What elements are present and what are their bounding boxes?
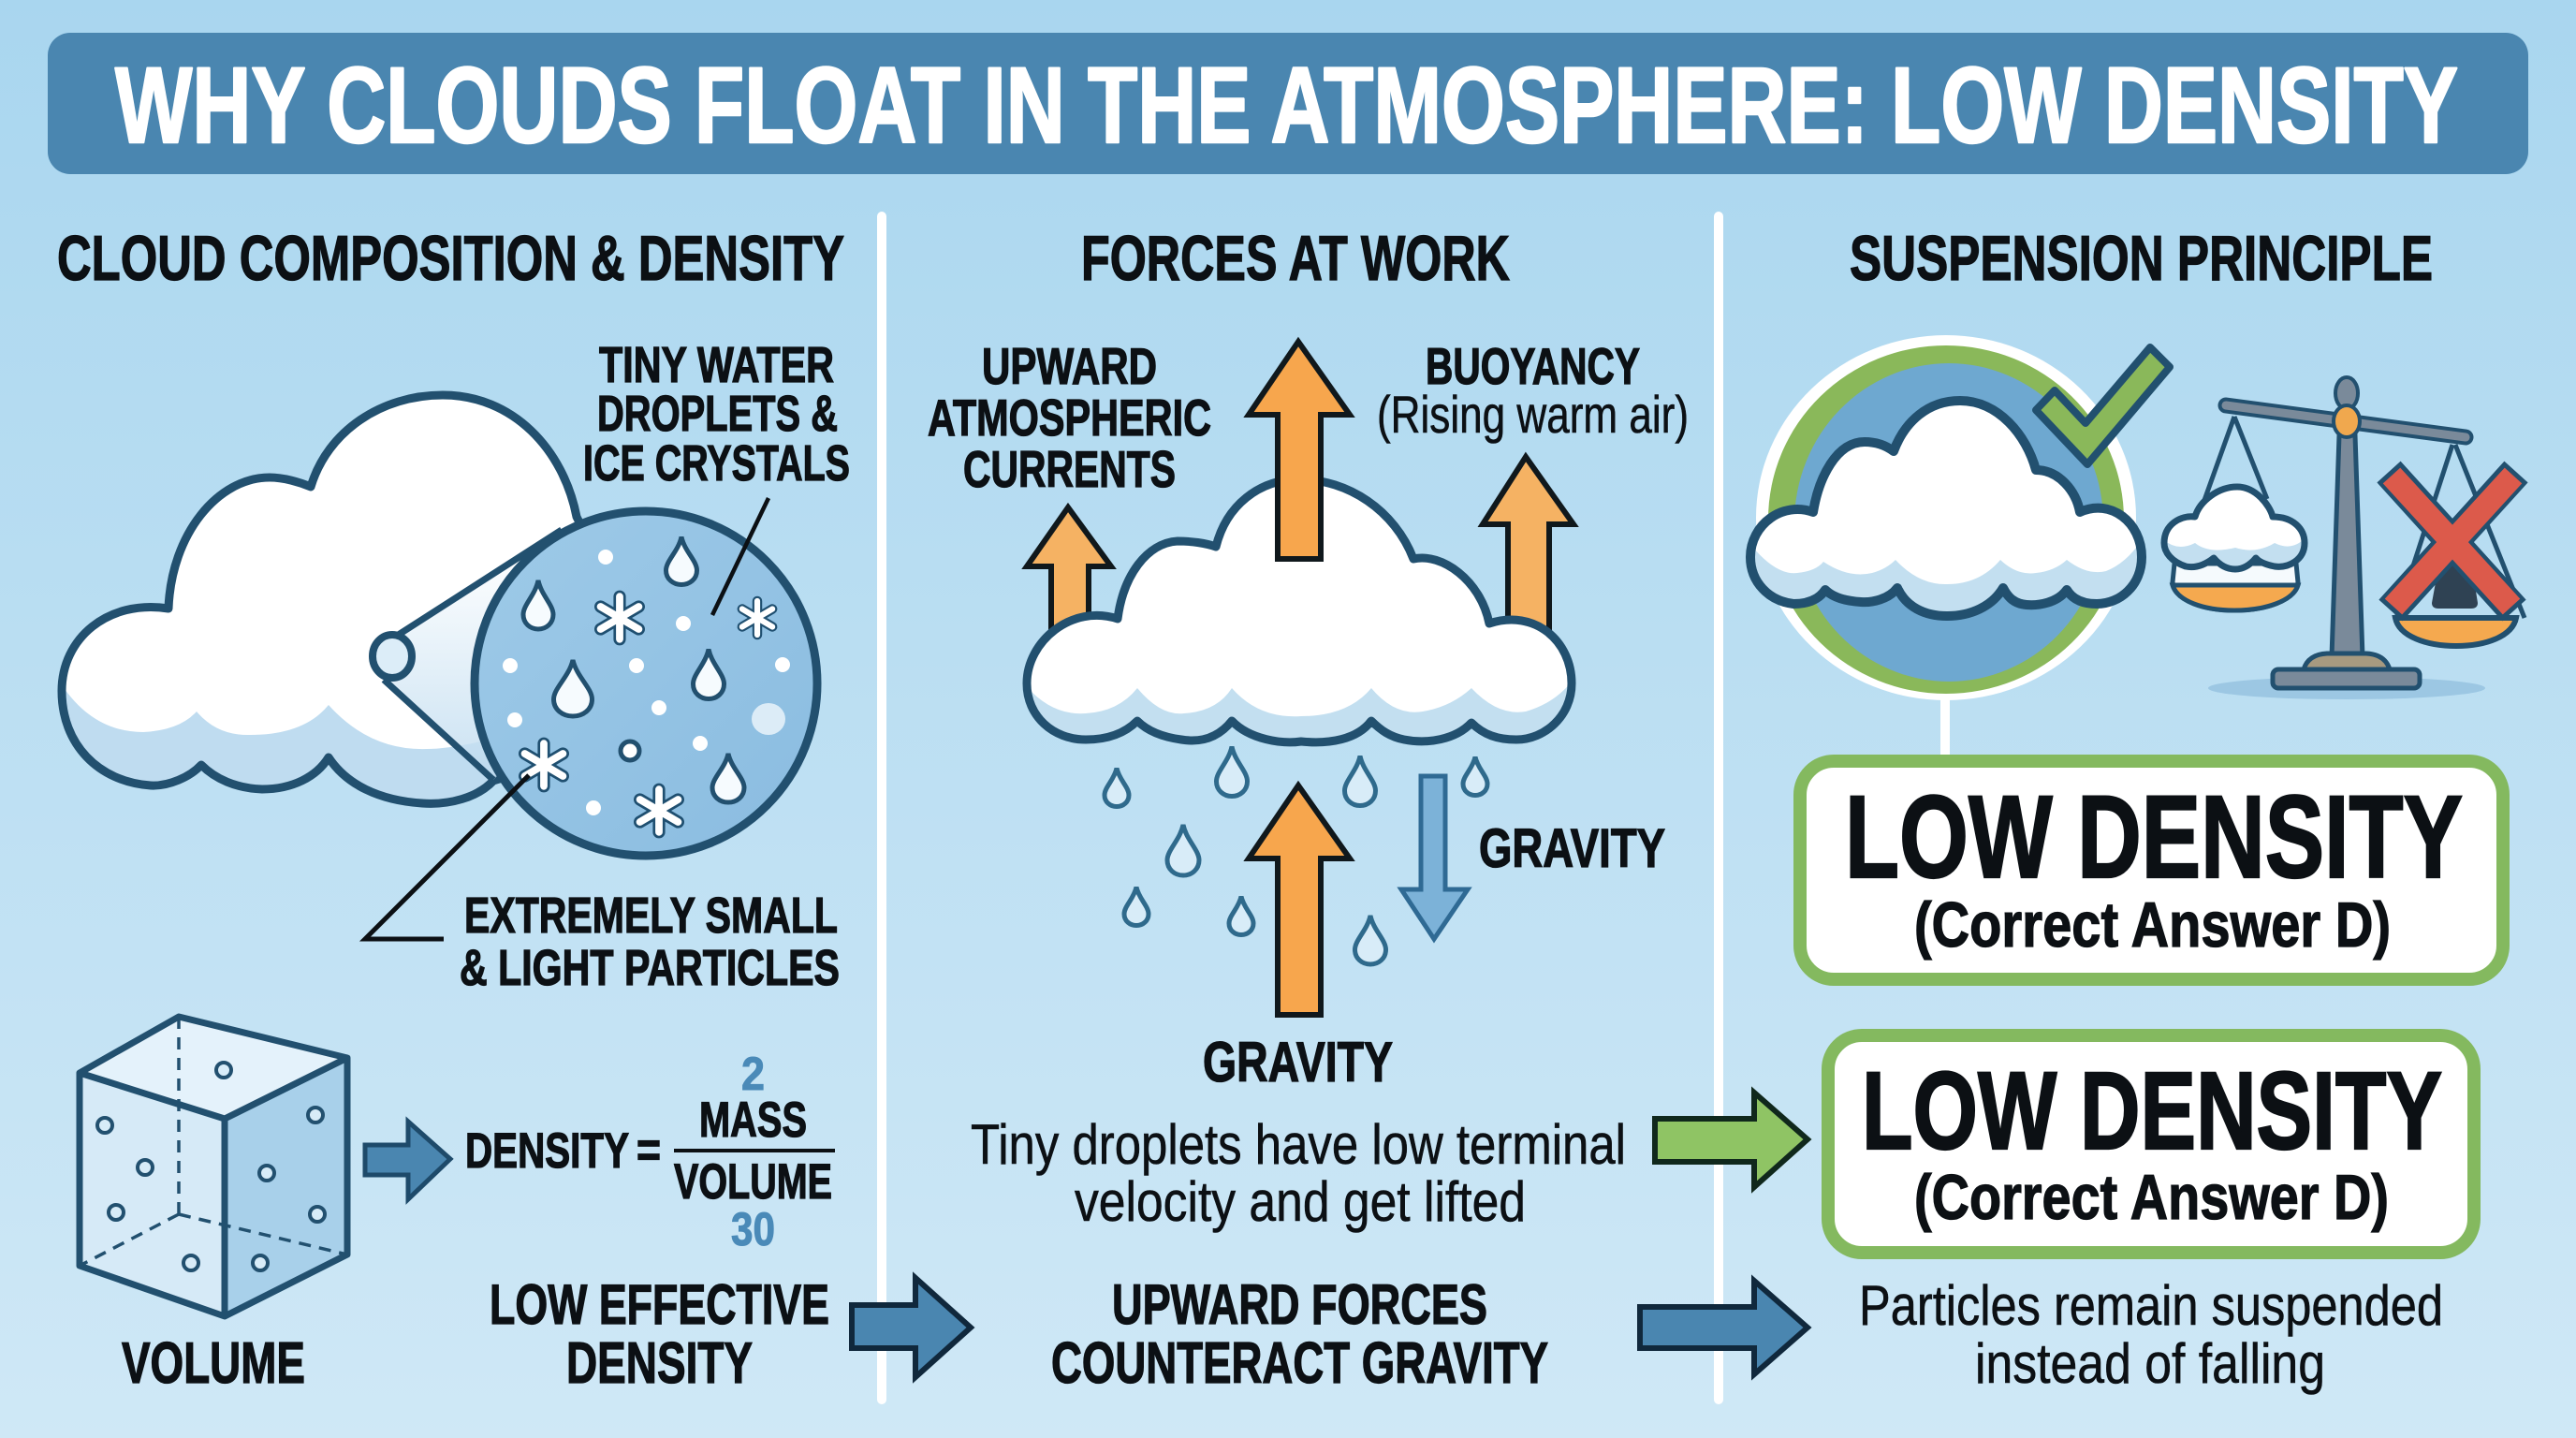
arrow: low density to upward forces [852,1278,971,1377]
label: upward forces counteract gravity [1051,1273,1548,1396]
label: upward atmospheric currents [928,337,1211,498]
icon: left scale pan [2173,564,2298,610]
icon: dark weight [2432,562,2478,609]
callout: low density answer box two: (Correct Answer D) [1914,1162,2389,1233]
icon: green ring with cloud [1746,335,2145,758]
label: gravity right: GRAVITY [1479,818,1665,879]
label: tiny water droplets and ice crystals [583,337,850,615]
text: tiny droplets explanation: velocity and get lifted [1075,1170,1526,1233]
panel: suspension principle [1746,223,2525,1395]
formula: density equals mass over volume: 2 [741,1048,765,1100]
icon: check mark [2036,347,2170,464]
label: buoyancy rising warm air: BUOYANCY [1426,337,1640,395]
text: tiny droplets explanation: Tiny droplets have low terminal [971,1113,1626,1176]
icon: large cloud [58,391,582,808]
formula: density equals mass over volume: VOLUME [674,1154,832,1210]
icon: balance scale [2162,377,2525,699]
label: buoyancy rising warm air: (Rising warm air) [1377,385,1689,444]
panel: forces at work [928,223,1689,1396]
label: low effective density [490,1273,829,1396]
text: particles remain suspended [1859,1274,2443,1395]
heading: forces at work: FORCES AT WORK [1081,223,1510,294]
arrow: cube to formula [365,1122,450,1199]
panel: cloud composition and density [56,223,850,1396]
label: upward atmospheric currents: CURRENTS [963,440,1176,498]
label: tiny water droplets and ice crystals: ICE CRYSTALS [583,435,850,492]
arrow: left upward current [1027,507,1111,637]
label: extremely small and light particles: EXTREMELY SMALL [464,888,838,944]
label: extremely small and light particles [365,775,840,996]
formula: density equals mass over volume [465,1048,835,1255]
arrow: green to answer [1655,1093,1808,1187]
arrow: lower upward [1249,785,1350,1015]
callout: low density answer box two [1828,1035,2474,1253]
icon: right scale pan [2395,618,2516,646]
formula: density equals mass over volume: DENSITY [465,1123,629,1179]
arrow: blue to suspended text [1640,1281,1808,1374]
label: gravity below: GRAVITY [1203,1031,1393,1093]
callout: low density answer box one: (Correct Answer D) [1914,889,2391,961]
callout: low density answer box one [1800,761,2503,979]
label: tiny water droplets and ice crystals: DROPLETS & [597,386,838,442]
icon: magnifier cone [373,530,562,780]
column dividers [877,212,1723,1404]
label: upward forces counteract gravity: COUNTERACT GRAVITY [1051,1331,1548,1396]
arrow: gravity downward [1401,776,1468,939]
label: extremely small and light particles: & LIGHT PARTICLES [460,940,840,996]
icon: rain droplets [1105,747,1487,964]
heading: cloud composition: CLOUD COMPOSITION & DENSITY [57,223,844,294]
label: tiny water droplets and ice crystals: TINY WATER [599,337,834,393]
label: volume: VOLUME [122,1331,305,1396]
text: particles remain suspended: instead of falling [1975,1332,2325,1395]
icon: central cloud [1020,479,1577,749]
icon: small cloud on pan [2162,487,2307,571]
label: low effective density: LOW EFFECTIVE [490,1273,829,1336]
label: low effective density: DENSITY [566,1331,753,1396]
icon: red cross [2389,472,2516,610]
arrow: main upward [1249,342,1350,559]
label: upward atmospheric currents: ATMOSPHERIC [928,389,1211,447]
label: buoyancy rising warm air [1377,337,1689,444]
text: tiny droplets explanation [971,1113,1626,1233]
formula: density equals mass over volume: = [637,1123,661,1178]
icon: magnified particle circle [475,511,817,856]
label: upward forces counteract gravity: UPWARD FORCES [1112,1273,1487,1336]
label: upward atmospheric currents: UPWARD [982,337,1157,395]
icon: volume cube [80,1017,347,1316]
formula: density equals mass over volume: 30 [731,1203,775,1255]
text: particles remain suspended: Particles remain suspended [1859,1274,2443,1337]
arrow: right buoyancy [1483,457,1573,637]
formula: density equals mass over volume: MASS [699,1093,807,1148]
